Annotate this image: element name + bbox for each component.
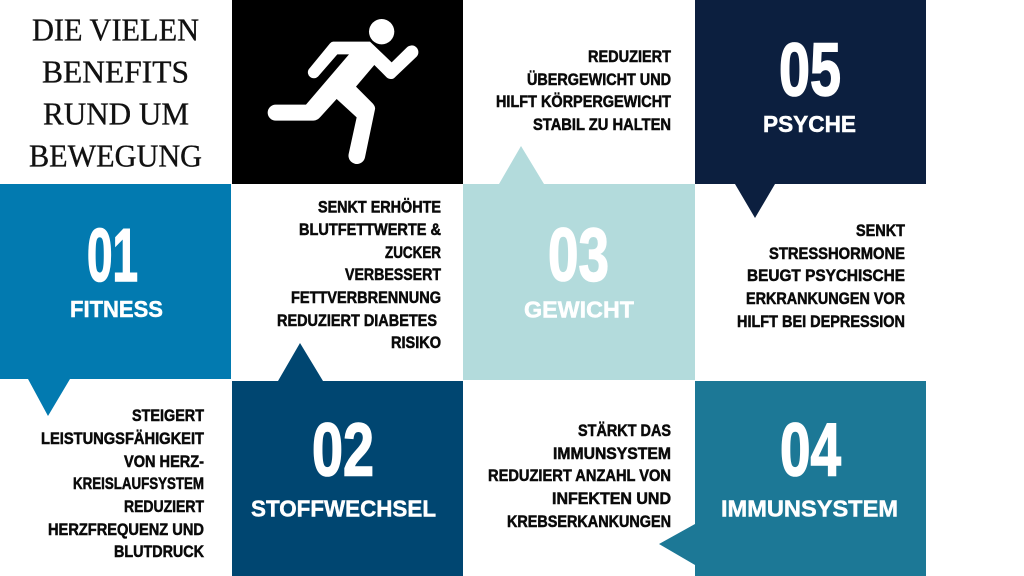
panel: 03 Gewicht xyxy=(463,146,695,380)
panel: 04 Immunsystem: IMMUNSYSTEM xyxy=(721,496,898,522)
text block: psyche benefits: HILFT BEI DEPRESSION xyxy=(737,312,905,331)
text block: gewicht benefits: HILFT KÖRPERGEWICHT xyxy=(496,92,672,111)
text block: fitness benefits xyxy=(41,406,205,561)
text block: immunsystem benefits: KREBSERKANKUNGEN xyxy=(507,512,671,531)
title: DIE VIELEN xyxy=(32,12,199,48)
panel: runner icon xyxy=(232,0,463,184)
text block: psyche benefits: SENKT xyxy=(856,221,906,240)
text block: fitness benefits: BLUTDRUCK xyxy=(114,542,205,561)
text block: gewicht benefits: ÜBERGEWICHT UND xyxy=(527,70,671,89)
title: RUND UM xyxy=(43,96,189,132)
text block: fitness benefits: REDUZIERT xyxy=(124,497,205,516)
panel: 05 Psyche: 05 xyxy=(779,28,841,112)
panel: 01 Fitness xyxy=(0,184,231,416)
text block: fitness benefits: KREISLAUFSYSTEM xyxy=(73,474,204,493)
text block: psyche benefits: STRESSHORMONE xyxy=(769,244,905,263)
panel: 04 Immunsystem: 04 xyxy=(780,408,841,492)
text block: psyche benefits xyxy=(737,221,906,331)
panel: 01 Fitness: FITNESS xyxy=(70,296,163,322)
text block: fitness benefits: HERZFREQUENZ UND xyxy=(48,520,204,539)
text block: immunsystem benefits: INFEKTEN UND xyxy=(552,489,671,508)
text block: stoffwechsel benefits: SENKT ERHÖHTE xyxy=(318,198,441,216)
text block: immunsystem benefits: REDUZIERT ANZAHL VON xyxy=(488,466,671,485)
text block: gewicht benefits: REDUZIERT xyxy=(588,47,672,66)
icon: running figure xyxy=(268,19,418,164)
text block: gewicht benefits xyxy=(496,47,672,134)
text block: stoffwechsel benefits: RISIKO xyxy=(391,333,441,352)
title: BEWEGUNG xyxy=(29,138,202,174)
text block: immunsystem benefits: IMMUNSYSTEM xyxy=(553,444,671,463)
text block: fitness benefits: VON HERZ- xyxy=(124,452,204,471)
text block: gewicht benefits: STABIL ZU HALTEN xyxy=(533,115,671,134)
text block: immunsystem benefits xyxy=(488,421,671,531)
panel: 01 Fitness: 01 xyxy=(87,213,138,297)
text block: psyche benefits: ERKRANKUNGEN VOR xyxy=(746,289,905,308)
panel: 02 Stoffwechsel xyxy=(232,343,463,576)
text block: fitness benefits: STEIGERT xyxy=(132,406,205,425)
panel: 05 Psyche: PSYCHE xyxy=(763,111,856,137)
panel: 03 Gewicht: 03 xyxy=(548,212,609,296)
text block: psyche benefits: BEUGT PSYCHISCHE xyxy=(747,266,905,285)
panel: 03 Gewicht: GEWICHT xyxy=(524,296,635,322)
panel: 05 Psyche xyxy=(695,0,926,218)
text block: stoffwechsel benefits xyxy=(277,198,442,352)
text block: stoffwechsel benefits: BLUTFETTWERTE & xyxy=(299,220,441,239)
text block: stoffwechsel benefits: VERBESSERT xyxy=(345,265,442,284)
text block: immunsystem benefits: STÄRKT DAS xyxy=(578,421,671,440)
panel: 02 Stoffwechsel: 02 xyxy=(312,408,374,492)
text block: stoffwechsel benefits: REDUZIERT DIABETES xyxy=(277,311,437,330)
panel: 02 Stoffwechsel: STOFFWECHSEL xyxy=(251,496,436,522)
text block: stoffwechsel benefits: FETTVERBRENNUNG xyxy=(291,288,441,307)
panel: 04 Immunsystem xyxy=(659,381,926,576)
title xyxy=(29,12,202,174)
text block: stoffwechsel benefits: ZUCKER xyxy=(385,243,441,262)
title: BENEFITS xyxy=(42,54,189,90)
text block: fitness benefits: LEISTUNGSFÄHIGKEIT xyxy=(41,429,205,448)
